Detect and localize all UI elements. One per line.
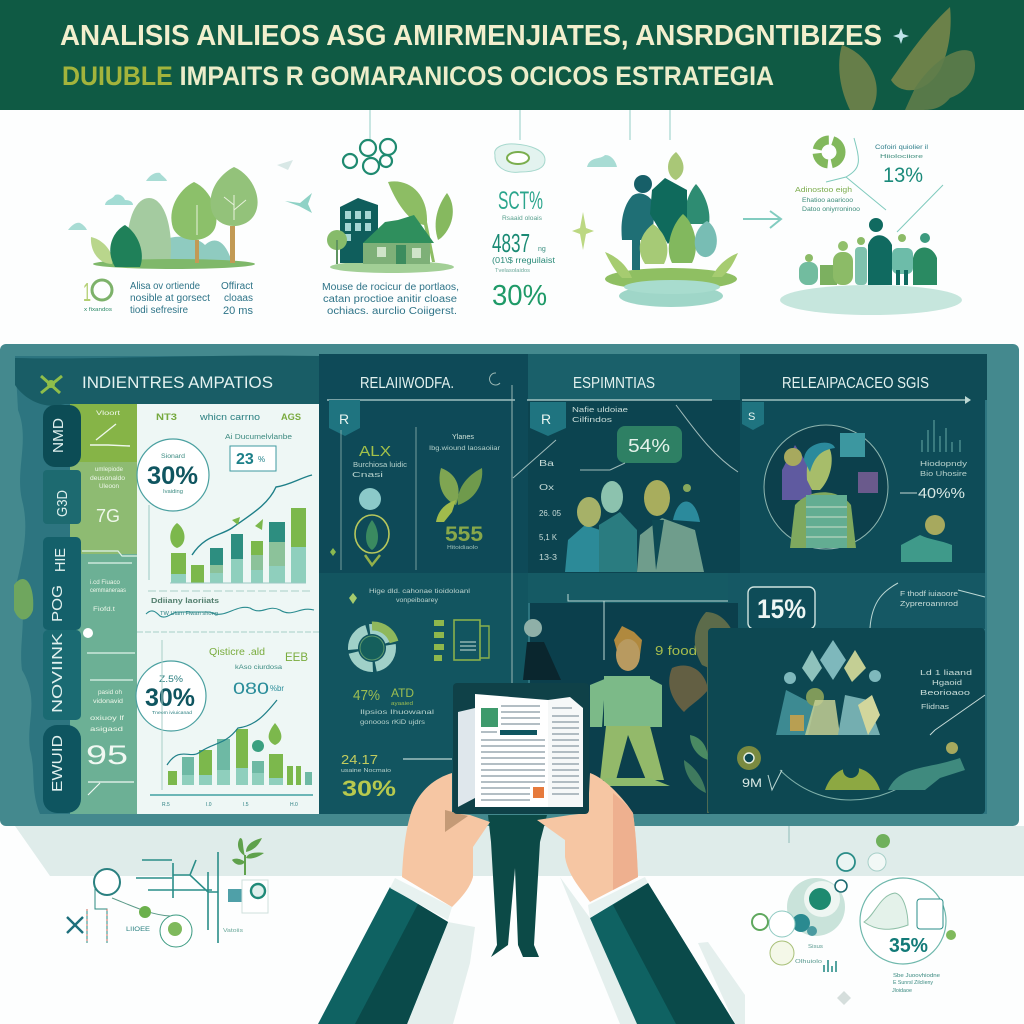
top row scene 4: community: Ehatioo aoaricoo <box>802 198 854 204</box>
icon: numbered badge: 1 <box>83 277 91 307</box>
subpanel left: ALX <box>359 443 391 460</box>
panel: strategies column: Nafie uldoiae <box>572 407 628 414</box>
stat circle: 30 percent top: 30% <box>147 462 198 490</box>
top row text block 2: ochiacs. aurclio Coiigerst. <box>327 306 457 317</box>
stat circle: 30 percent lower <box>136 661 206 731</box>
top row text block 1: tiodi sefresire <box>130 305 188 316</box>
top row text block 1 <box>83 277 253 317</box>
icon: drop and badge <box>269 723 281 745</box>
bar chart lower: I.5 <box>243 802 249 808</box>
lower chart labels: %br <box>270 684 284 693</box>
top row text block 1: nosible at gorsect <box>130 293 210 304</box>
icon tab <box>742 402 764 430</box>
stat circle: 30 percent top: Sionard <box>161 454 185 460</box>
lower left group: 30% <box>342 776 396 801</box>
panel: callout 15 percent band <box>728 573 985 629</box>
icon: four-point star <box>572 212 594 250</box>
sparkline section <box>146 591 314 617</box>
bar chart lower: R.5 <box>162 802 170 808</box>
lower left group: ATD <box>391 686 414 700</box>
subpanel right: Hitoidiaolo <box>447 545 478 551</box>
top row text block 1: Offiract <box>221 281 253 292</box>
green sidebar <box>70 404 138 814</box>
icon: sparkle arrow <box>285 193 312 213</box>
sidebar texts: 95 <box>86 740 128 770</box>
icon: document stack <box>434 620 489 661</box>
lower left group <box>341 588 489 801</box>
top row statistics column: ng <box>538 246 546 253</box>
icon tab <box>530 402 566 436</box>
right labels: Ld 1 liaand <box>920 670 972 677</box>
title line two: DUIUBLE IMPAITS R GOMARANICOS OCICOS ESTRATEGIA <box>62 61 774 91</box>
bar chart lower: I.0 <box>206 802 212 808</box>
person circle illustration <box>764 425 888 549</box>
lower chart labels: 080 <box>233 679 269 698</box>
heading: indicators: INDIENTRES AMPATIOS <box>82 373 273 392</box>
icon: header leaves <box>839 7 975 110</box>
icon: olive ring <box>737 746 761 770</box>
icon tab <box>329 400 360 436</box>
icon: numbered badge: x fixandos <box>84 307 113 313</box>
vertical tab labels: NOVIINK <box>49 633 66 713</box>
subpanel left <box>330 427 416 570</box>
bottom right cluster: Sisus <box>808 944 824 950</box>
bottom right cluster: Olhuiolo <box>795 959 822 965</box>
sidebar texts: Uleoon <box>99 483 119 490</box>
panel: lower centre with figures and tree <box>523 594 739 814</box>
top row text block 2: Mouse de rocicur de portlaos, <box>322 282 459 293</box>
lower left group: Ilpsios Ihuowanal <box>360 710 434 716</box>
bottom left network diagram: LIIOEE <box>126 927 150 933</box>
lower left group: 24.17 <box>341 752 378 767</box>
right labels: Flidnas <box>921 704 950 711</box>
bottom right cluster: 35% <box>889 935 928 957</box>
stat circle: 30 percent top <box>137 439 209 511</box>
stat circle: 30 percent top: Ivaiding <box>163 489 183 495</box>
left mini stats: 5,1 K <box>539 533 558 542</box>
top row text block 1: cloaas <box>224 293 253 304</box>
label: green note: 9 food <box>655 643 697 658</box>
bottom right cluster: Jloidaoe <box>892 988 912 994</box>
panel: strategies column <box>513 354 740 603</box>
illustration: three people <box>565 480 704 572</box>
icon: faded plant <box>14 579 33 619</box>
icon: crossed tools <box>41 376 62 393</box>
icon: recycling symbol <box>817 140 841 164</box>
vertical tab labels: G3D <box>54 490 71 517</box>
top row text block 1: 20 ms <box>223 305 253 317</box>
arm shadows <box>407 877 745 1024</box>
subpanel right: 555 <box>445 523 483 546</box>
heading: ESPIMNTIAS <box>573 375 655 392</box>
panel: callout 15 percent band: F thodf iuiaoore <box>900 591 958 598</box>
sidebar texts: umlepiode <box>95 466 123 473</box>
bar chart lower <box>150 640 313 808</box>
sidebar texts: 7G <box>96 506 120 526</box>
title line one: ANALISIS ANLIEOS ASG AMIRMENJIATES, ANSRDGNTIBIZES <box>60 20 882 52</box>
lower chart labels <box>209 647 308 698</box>
lower left group: ayaaied <box>391 701 413 707</box>
sidebar texts: i.cd Fiuaco <box>90 579 120 586</box>
vertical tab labels: NMD <box>50 418 67 453</box>
icon: green chain knot <box>343 139 396 174</box>
icon: numbered badge <box>83 277 113 313</box>
bottom right cluster <box>752 826 956 1005</box>
cluster of kites <box>776 640 881 735</box>
arrow to community scene <box>743 211 781 228</box>
panel: reports column <box>740 354 987 573</box>
chart header labels: Ai Ducumelvlanbe <box>225 434 292 441</box>
sidebar texts: deusonaldo <box>90 475 125 482</box>
top row scene 4: community: 13% <box>883 164 923 187</box>
subpanel right: Ylanes <box>452 434 475 441</box>
left mini stats: 13-3 <box>539 553 558 562</box>
lower left group: Hige dld. cahonae tioidoloanl <box>369 588 471 595</box>
right labels: Hgaoid <box>932 680 962 687</box>
chart header labels <box>156 412 301 441</box>
callout: 23 percent: 23 <box>236 451 254 468</box>
right hand <box>537 773 648 918</box>
top row scene 4: community: Adinostoo eigh <box>795 187 852 194</box>
sidebar texts <box>82 410 138 795</box>
right sleeve <box>590 883 735 1024</box>
callout: 23 percent <box>230 446 276 471</box>
top row statistics column: 4837 <box>492 228 530 258</box>
panel: chart sheet <box>136 404 319 814</box>
subpanel right: Ibg.wiound laosaoiiar <box>429 446 500 452</box>
panel: callout 15 percent band: 15% <box>757 594 806 624</box>
top row statistics column: 30% <box>492 280 547 312</box>
bar chart top <box>149 475 312 583</box>
panel: lower right with kite cluster: 9M <box>742 776 762 790</box>
trend line top <box>192 475 312 555</box>
figure dark <box>523 619 561 680</box>
icon: cloud badge <box>495 144 545 172</box>
sidebar texts: Fiofd.t <box>93 606 115 613</box>
subpanel right <box>429 434 500 551</box>
lower left group: gonooos rKiD ujdrs <box>360 720 425 726</box>
stat circle: 30 percent lower: Tneom iviuicanad <box>152 710 193 715</box>
top row text block 1: Alisa ov ortiende <box>130 281 200 292</box>
top row scene 4: community: Cofoiri quiolier il <box>875 145 928 151</box>
vertical tab labels <box>43 405 81 813</box>
lower left group: usaine Nocmaio <box>341 768 391 774</box>
top row scene 3: people and trees <box>587 152 738 307</box>
tablet with report <box>453 683 589 814</box>
lower chart labels: EEB <box>285 650 308 664</box>
top row statistics column: Tvelasolaidos <box>495 268 531 274</box>
figure green man <box>590 626 670 786</box>
panel: relationship column <box>319 354 528 814</box>
donut chart <box>353 626 394 667</box>
dashboard frame <box>0 344 1019 826</box>
stat circle: 30 percent lower: 30% <box>145 684 195 712</box>
subpanel left: Cnasi <box>352 472 384 479</box>
top row scene 2: house and building <box>327 139 454 273</box>
vertical tab labels: POG <box>49 585 66 622</box>
top row scene 4: community: Datoo oniyrroninoo <box>802 207 861 213</box>
mini bar chart and stat <box>900 420 968 562</box>
right labels: Beorioaoo <box>920 690 970 697</box>
panel: reports column: S <box>748 411 755 423</box>
chart header labels: AGS <box>281 412 301 422</box>
top row scene 1: forest <box>68 160 293 269</box>
sidebar texts: cemmaneraas <box>90 587 127 594</box>
figure lying <box>888 758 965 790</box>
top row statistics column <box>492 144 556 312</box>
vertical tab labels: HIE <box>52 548 69 572</box>
icon: header sparkle <box>893 28 909 44</box>
sidebar texts: asigasd <box>90 726 124 733</box>
lower left group: vonpeiboarey <box>396 598 438 604</box>
panel: strategies column: R <box>541 411 551 427</box>
top row statistics column: SCT% <box>498 187 543 215</box>
left mini stats: Ox <box>539 483 554 492</box>
panel: strategies column: Cilfindos <box>572 417 613 424</box>
top row text block 2 <box>322 282 459 317</box>
panel: indicators column <box>14 356 320 814</box>
stat circle: 30 percent lower: Z.5% <box>159 674 183 684</box>
chart header labels: NT3 <box>156 412 177 422</box>
left mini stats: 26. 05 <box>539 509 562 518</box>
panel: relationship column: R <box>339 411 349 427</box>
header banner <box>0 0 1024 110</box>
lower left group: 47% <box>353 687 380 704</box>
top row statistics column: Rsaaid oloais <box>502 216 542 222</box>
left sleeve <box>318 887 448 1024</box>
bottom left network diagram <box>67 838 268 947</box>
right labels <box>920 670 972 711</box>
sidebar texts: oxiuoy lf <box>90 715 124 722</box>
panel: lower right with kite cluster <box>708 628 985 814</box>
top row text block 2: catan proctioe anitir cloase <box>323 294 457 305</box>
mini bar chart and stat: Bio Uhosire <box>920 471 967 478</box>
heading: RELEAIPACACEO SGIS <box>782 375 929 392</box>
chart header labels: whicn carrno <box>199 412 260 422</box>
subpanel left: Burchiosa luidic <box>353 462 408 469</box>
bottom left network diagram: Vatoiis <box>223 928 244 934</box>
tree <box>669 612 739 813</box>
top threads <box>370 110 670 140</box>
left hand <box>390 773 490 920</box>
bar chart lower: H.0 <box>290 802 298 808</box>
panel: callout 15 percent band: Zypreroannrod <box>900 601 958 608</box>
sparkline section: Ddiiany laoriiats <box>151 598 219 605</box>
callout: 54 percent <box>617 426 682 463</box>
sidebar texts: vidonavid <box>93 698 123 705</box>
sidebar texts: Vloort <box>96 410 120 417</box>
mini bar chart and stat: Hiodopndy <box>920 461 968 468</box>
sparkline section: TW Ulam Fiwan shong <box>160 611 218 617</box>
top row statistics column: (01\$ rreguilaist <box>492 256 556 265</box>
bottom right cluster: Sbe Juoovhiodne <box>893 973 940 979</box>
left mini stats: Ba <box>539 459 555 468</box>
central figure <box>488 815 547 957</box>
heading: RELAIIWODFA. <box>360 375 454 392</box>
top row scene 4: community: Hiiolociiore <box>880 154 923 160</box>
callout: 23 percent: % <box>258 455 265 464</box>
icon: globe dome <box>825 768 880 790</box>
pale band under dashboard <box>15 826 1024 876</box>
lower chart labels: Qisticre .ald <box>209 647 265 658</box>
vertical tab labels: EWUID <box>49 735 66 792</box>
bottom right cluster: E Sunrsl Zilclieny <box>893 980 933 986</box>
bottom hands, arms and figure <box>318 683 745 1024</box>
icon: leaves <box>439 468 459 505</box>
mini bar chart and stat: 40%% <box>918 485 965 502</box>
callout: 54 percent: 54% <box>628 436 670 456</box>
sidebar texts: pasid oh <box>98 689 122 696</box>
lower chart labels: kAso ciurdosa <box>235 664 282 671</box>
icon: sprout <box>232 838 264 875</box>
top row scene 4: community <box>780 138 962 315</box>
left mini stats <box>539 459 562 562</box>
icon: leaves on chart <box>170 523 184 548</box>
